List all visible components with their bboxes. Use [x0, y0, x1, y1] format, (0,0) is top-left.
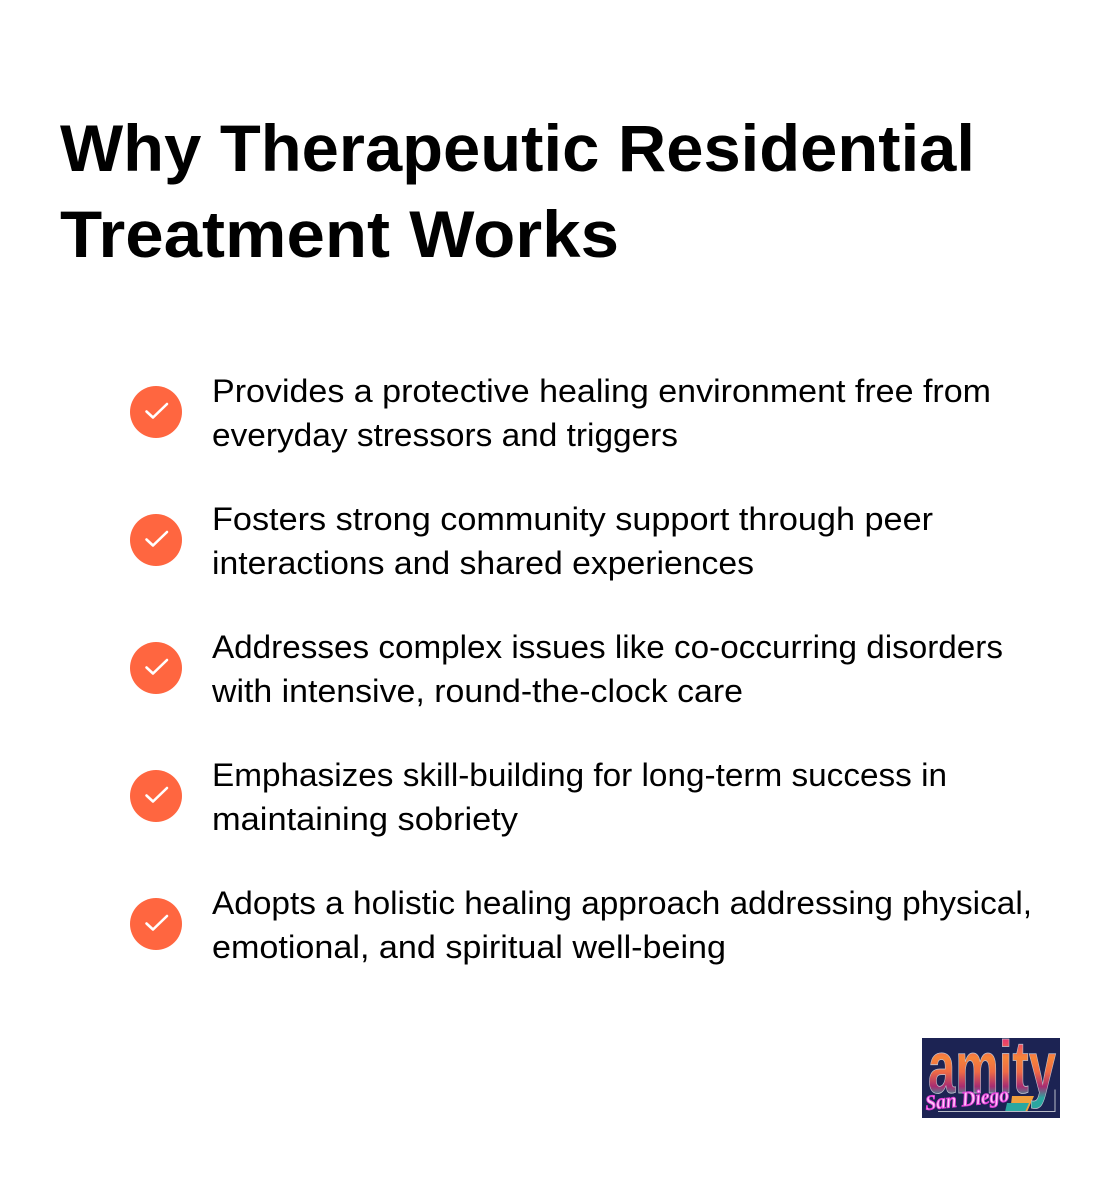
list item 2 [130, 501, 933, 581]
text: item 4: maintaining sobriety [212, 801, 518, 837]
list item 4 [130, 757, 947, 837]
text: item 1 [212, 373, 991, 453]
title: Why Therapeutic Residential [60, 111, 975, 185]
title: Treatment Works [60, 197, 619, 271]
text: item 2: interactions and shared experiences [212, 545, 754, 581]
text: item 4 [212, 757, 947, 837]
title [60, 111, 975, 271]
text: item 3: with intensive, round-the-clock care [211, 673, 743, 709]
text: item 4: Emphasizes skill-building for long-term success in [212, 757, 947, 793]
text: item 3: Addresses complex issues like co-occurring disorders [212, 629, 1003, 665]
logo: Amity San Diego [922, 1026, 1060, 1118]
icon: check badge 2 [130, 514, 182, 566]
list item 1 [130, 373, 991, 453]
text: item 2 [212, 501, 933, 581]
text: item 5: Adopts a holistic healing approach addressing physical, [212, 885, 1032, 921]
icon: check badge 1 [130, 386, 182, 438]
icon: check badge 4 [130, 770, 182, 822]
list item 3 [130, 629, 1003, 709]
text: item 5 [212, 885, 1032, 965]
icon: check badge 3 [130, 642, 182, 694]
icon: check badge 5 [130, 898, 182, 950]
list item 5 [130, 885, 1032, 965]
text: item 3 [211, 629, 1003, 709]
logo wordmark: amity: amity [928, 1026, 1056, 1109]
text: item 1: Provides a protective healing environment free from [212, 373, 991, 409]
text: item 2: Fosters strong community support through peer [212, 501, 933, 537]
text: item 1: everyday stressors and triggers [212, 417, 678, 453]
logo script: San Diego: San Diego [924, 1082, 1010, 1115]
text: item 5: emotional, and spiritual well-being [212, 929, 726, 965]
